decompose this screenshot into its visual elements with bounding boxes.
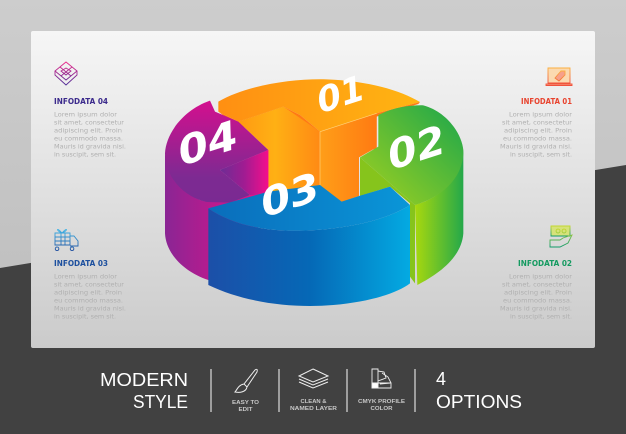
footer title: modern style: STYLE — [133, 392, 188, 412]
footer title: 4 options: OPTIONS — [436, 392, 522, 412]
label: clean and named layer: NAMED LAYER — [290, 406, 337, 412]
text block: infodata 04: sit amet, consectetur — [54, 118, 124, 126]
text block: infodata 02: eu commodo massa. — [503, 296, 572, 304]
label: easy to edit: EDIT — [238, 407, 253, 413]
icon: laptop with tag — [546, 68, 572, 86]
text block: infodata 02: Mauris id gravida nisi. — [500, 304, 572, 312]
label: cmyk profile color — [358, 399, 405, 412]
text block: infodata 01 — [500, 97, 572, 158]
icon: brush — [235, 369, 257, 392]
label: cmyk profile color: CMYK PROFILE — [358, 399, 405, 405]
text block: infodata 03: Mauris id gravida nisi. — [54, 304, 126, 312]
number 03: 03 — [256, 164, 324, 226]
footer title: modern style: MODERN — [100, 370, 188, 390]
text block: infodata 01: eu commodo massa. — [503, 134, 572, 142]
label: easy to edit — [232, 400, 260, 413]
segment 02 green — [360, 105, 463, 285]
text block: infodata 01: adipiscing elit. Proin — [504, 126, 572, 134]
segment 01 orange — [218, 79, 420, 202]
segment 03 blue — [208, 185, 410, 306]
footer title: modern style — [100, 370, 188, 412]
text block: infodata 01: sit amet, consectetur — [502, 118, 572, 126]
segment 04 magenta — [165, 101, 268, 280]
number 04: 04 — [173, 111, 243, 175]
text block: infodata 04: in suscipit, sem sit. — [54, 150, 116, 158]
label: clean and named layer — [290, 399, 337, 412]
chart: 3D segmented ring — [165, 68, 463, 306]
text block: infodata 02: INFODATA 02 — [518, 259, 572, 268]
text block: infodata 02: adipiscing elit. Proin — [504, 288, 572, 296]
footer title: 4 options — [436, 369, 522, 412]
text block: infodata 03: sit amet, consectetur — [54, 280, 124, 288]
icon: layers — [299, 369, 328, 388]
icon: delivery truck — [55, 229, 78, 251]
footer title: 4 options: 4 — [436, 369, 446, 389]
text block: infodata 03: in suscipit, sem sit. — [54, 312, 116, 320]
text block: infodata 01: Lorem ipsum dolor — [509, 110, 572, 118]
icon: color swatches — [372, 369, 391, 388]
text block: infodata 01: INFODATA 01 — [521, 97, 572, 106]
text block: infodata 01: in suscipit, sem sit. — [510, 150, 572, 158]
panel: main card — [31, 31, 595, 348]
number 01: 01 — [313, 68, 369, 122]
icon: hand holding money — [550, 226, 572, 247]
text block: infodata 01: Mauris id gravida nisi. — [500, 142, 572, 150]
label: cmyk profile color: COLOR — [370, 406, 392, 412]
label: clean and named layer: CLEAN & — [300, 399, 326, 405]
text block: infodata 04: adipiscing elit. Proin — [54, 126, 122, 134]
text block: infodata 04: eu commodo massa. — [54, 134, 123, 142]
text block: infodata 03: eu commodo massa. — [54, 296, 123, 304]
text block: infodata 02: sit amet, consectetur — [502, 280, 572, 288]
text block: infodata 04: Mauris id gravida nisi. — [54, 142, 126, 150]
text block: infodata 02: Lorem ipsum dolor — [509, 272, 572, 280]
label: easy to edit: EASY TO — [232, 400, 260, 406]
number 02: 02 — [383, 116, 450, 179]
text block: infodata 03: adipiscing elit. Proin — [54, 288, 122, 296]
icon: box — [55, 62, 77, 85]
text block: infodata 04 — [54, 97, 126, 158]
text block: infodata 03 — [54, 259, 126, 320]
text block: infodata 03: Lorem ipsum dolor — [54, 272, 117, 280]
text block: infodata 04: Lorem ipsum dolor — [54, 110, 117, 118]
text block: infodata 03: INFODATA 03 — [54, 259, 108, 268]
text block: infodata 02 — [500, 259, 572, 320]
text block: infodata 02: in suscipit, sem sit. — [510, 312, 572, 320]
text block: infodata 04: INFODATA 04 — [54, 97, 108, 106]
